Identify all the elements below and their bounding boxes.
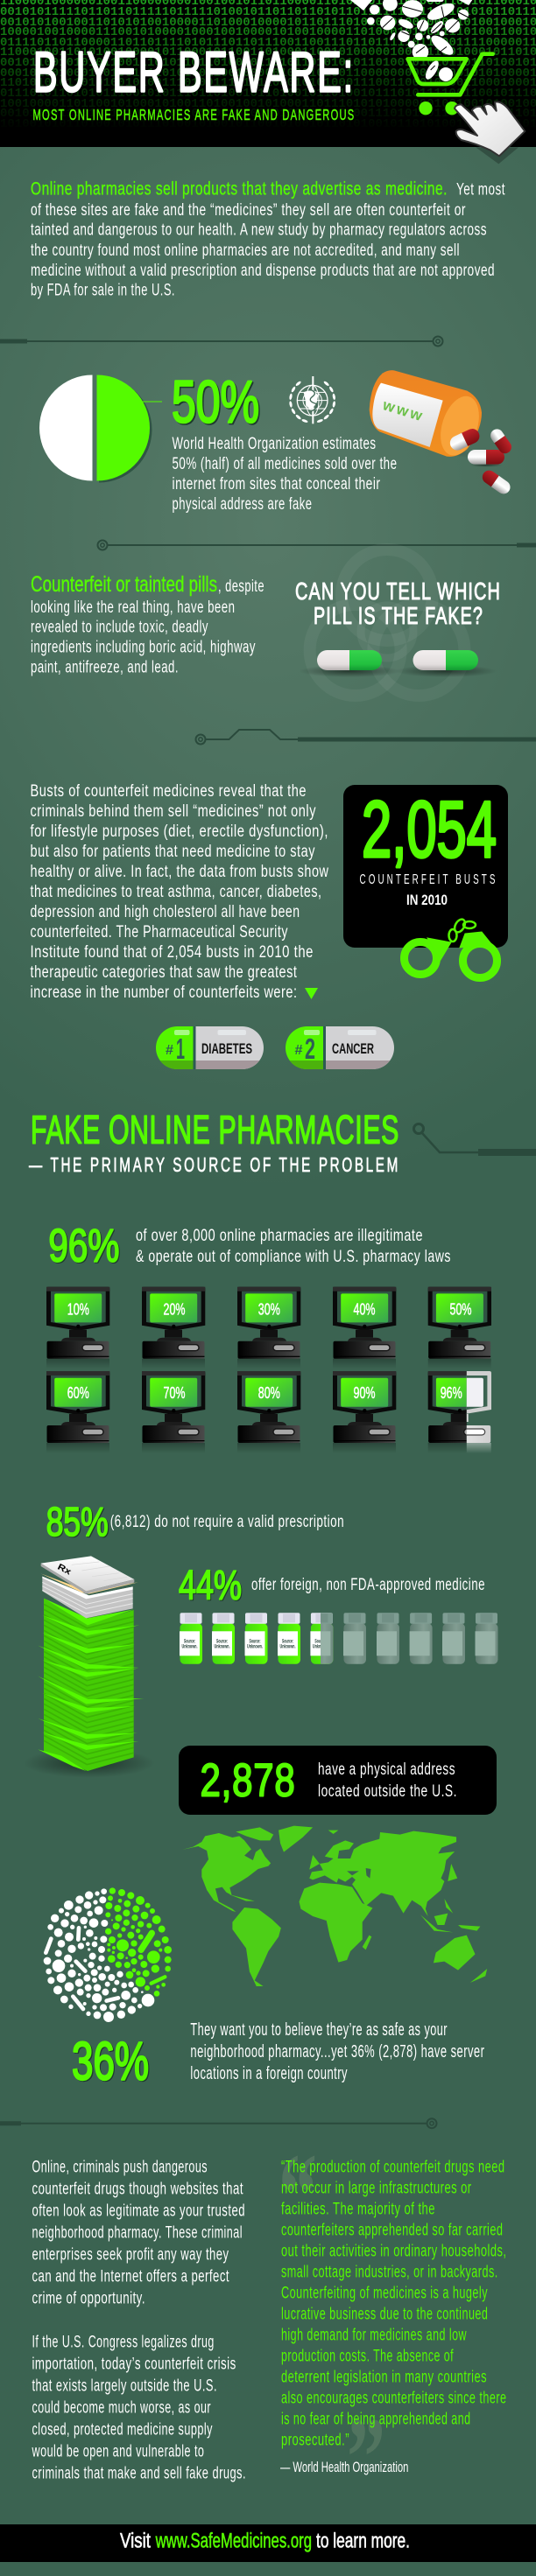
computer 96%: 96% bbox=[441, 1384, 462, 1402]
illustration: stack of prescriptions bbox=[24, 1556, 155, 1778]
icon: shopping cart bbox=[408, 54, 493, 94]
pictogram: computers 10% to 96% bbox=[46, 1287, 491, 1453]
text: online criminals: can and the Internet offers a perfect bbox=[32, 2268, 229, 2286]
text: counterfeit or tainted pills: revealed to include toxic, deadly bbox=[31, 619, 208, 637]
chart: pills dot circle 36% bbox=[44, 1887, 172, 2022]
computer 60% bbox=[46, 1371, 109, 1453]
text: WHO estimate: World Health Organization estimates bbox=[172, 435, 377, 453]
binary code pattern bbox=[0, 0, 536, 131]
computer 40%: 40% bbox=[354, 1300, 375, 1318]
text: congress importation: would be open and vulnerable to bbox=[32, 2443, 204, 2461]
heading: can you tell which pill is the fake bbox=[295, 578, 501, 629]
text: server locations: locations in a foreign country bbox=[190, 2064, 348, 2083]
decorative quotation marks: “ bbox=[279, 2131, 317, 2257]
circuit divider bbox=[413, 1124, 536, 1152]
divider bbox=[0, 2118, 436, 2128]
panel: 2,878 physical address outside the U.S.: located outside the U.S. bbox=[318, 1782, 457, 1801]
icon: hand cursor bbox=[476, 147, 518, 164]
divider bbox=[98, 541, 536, 550]
text: busts of counterfeit medicines: criminals behind them sell “medicines” not only bbox=[30, 802, 316, 821]
stat: 96% illegitimate: 96% bbox=[49, 1222, 121, 1272]
computer 70% bbox=[142, 1371, 205, 1453]
footer bar: to learn more. bbox=[316, 2530, 410, 2553]
text: online criminals: neighborhood pharmacy. These criminal bbox=[32, 2224, 243, 2243]
text: counterfeit or tainted pills bbox=[31, 572, 264, 677]
text: server locations bbox=[190, 2020, 484, 2083]
stat: 50%: 50% bbox=[172, 369, 259, 436]
stat: 50%: 50% bbox=[173, 370, 261, 437]
icon: handcuffs bbox=[405, 918, 497, 978]
stat: 44% foreign medicine: 44% bbox=[179, 1561, 242, 1608]
text: online criminals: counterfeit drugs though websites that bbox=[32, 2180, 243, 2199]
green pills bbox=[105, 1887, 172, 1997]
stat: 36%: 36% bbox=[73, 2032, 150, 2091]
decorative quotation marks bbox=[279, 2131, 385, 2521]
stat: 85% no prescription: (6,812) do not require a valid prescription bbox=[110, 1513, 344, 1531]
text: congress importation: criminals that make and sell fake drugs. bbox=[32, 2465, 246, 2483]
text: busts of counterfeit medicines: but also for patients that need medicine to stay bbox=[30, 843, 315, 861]
text: congress importation: that exists largely outside the U.S. bbox=[32, 2377, 217, 2396]
panel: 2,054 counterfeit busts: IN 2010 bbox=[406, 892, 448, 908]
computer 90% bbox=[333, 1371, 396, 1453]
capsule: #2 cancer: CANCER bbox=[332, 1040, 374, 1057]
computer 30%: 30% bbox=[258, 1300, 280, 1318]
text: congress importation bbox=[32, 2334, 246, 2483]
text: busts of counterfeit medicines: Institute found that of 2,054 busts in 2010 the bbox=[30, 943, 314, 962]
header banner bbox=[0, 0, 536, 147]
pictogram: medicine bottles bbox=[180, 1613, 497, 1664]
attribution: — World Health Organization bbox=[280, 2460, 408, 2475]
text: online criminals bbox=[32, 2159, 245, 2308]
text: busts of counterfeit medicines: for lifestyle purposes (diet, erectile dysfunction), bbox=[30, 822, 328, 841]
text: busts of counterfeit medicines bbox=[30, 782, 329, 1002]
stat: 44% foreign medicine bbox=[179, 1561, 485, 1608]
panel: 2,054 counterfeit busts bbox=[343, 785, 508, 978]
computer 50%: 50% bbox=[450, 1300, 471, 1318]
quote: World Health Organization: prosecuted.” bbox=[281, 2432, 349, 2450]
stat: 85% no prescription bbox=[46, 1499, 344, 1545]
computer 90%: 90% bbox=[354, 1384, 375, 1402]
stat: 96% illegitimate: 96% bbox=[48, 1220, 119, 1272]
text: counterfeit or tainted pills: paint, antifreeze, and lead. bbox=[31, 659, 179, 677]
divider bbox=[196, 730, 536, 744]
text: online criminals: crime of opportunity. bbox=[32, 2290, 145, 2308]
icon: spilled pill bottle: www bbox=[380, 396, 427, 425]
divider bbox=[0, 336, 443, 346]
text: congress importation: could become much worse, as our bbox=[32, 2399, 211, 2418]
intro paragraph: by FDA for sale in the U.S. bbox=[31, 282, 175, 300]
stat: 85% no prescription: 85% bbox=[46, 1499, 109, 1544]
stat: 96% illegitimate bbox=[48, 1220, 451, 1272]
capsule: #1 diabetes: # bbox=[166, 1043, 173, 1058]
intro paragraph bbox=[31, 179, 505, 300]
text: busts of counterfeit medicines: Busts of counterfeit medicines reveal that the bbox=[30, 782, 307, 801]
gray bottles bbox=[310, 1613, 497, 1664]
quote: World Health Organization bbox=[280, 2159, 506, 2475]
computer 10%: 10% bbox=[67, 1300, 89, 1318]
icon: two capsules bbox=[299, 650, 497, 677]
title: BUYER BEWARE: bbox=[33, 40, 355, 103]
text: counterfeit or tainted pills: Counterfeit or tainted pills bbox=[31, 572, 217, 597]
text: congress importation: importation, today’s counterfeit crisis bbox=[32, 2356, 236, 2374]
intro paragraph: Yet most bbox=[456, 181, 505, 200]
footer bar bbox=[0, 2524, 536, 2562]
text: busts of counterfeit medicines: that medicines to treat asthma, cancer, diabetes, bbox=[30, 883, 322, 901]
computer 10% bbox=[46, 1287, 109, 1369]
text: online criminals: enterprises seek profit any way they bbox=[32, 2246, 229, 2264]
capsule: #2 cancer: # bbox=[294, 1043, 303, 1058]
computer 40% bbox=[333, 1287, 396, 1369]
text: counterfeit or tainted pills: ingredients including boric acid, highway bbox=[31, 639, 256, 657]
computer 20% bbox=[142, 1287, 205, 1369]
top prescription sheet bbox=[41, 1556, 134, 1591]
text: online criminals: often look as legitimate as your trusted bbox=[32, 2202, 245, 2221]
green bottles bbox=[180, 1613, 333, 1664]
text: counterfeit or tainted pills: looking like the real thing, have been bbox=[31, 598, 235, 617]
text: busts of counterfeit medicines: healthy or alive. In fact, the data from busts show bbox=[30, 863, 329, 881]
illustration: stack of prescriptions: Rx bbox=[56, 1563, 73, 1578]
capsule: #1 diabetes: DIABETES bbox=[201, 1040, 252, 1057]
capsule: #1 diabetes: 1 bbox=[176, 1032, 185, 1065]
text: congress importation: closed, protected medicine supply bbox=[32, 2421, 213, 2440]
text: busts of counterfeit medicines: increase in the number of counterfeits were: bbox=[30, 984, 298, 1002]
footer bar: Visit bbox=[120, 2530, 151, 2553]
text: busts of counterfeit medicines: counterfeited. The Pharmaceutical Security bbox=[30, 923, 288, 942]
tan sheet bbox=[41, 1573, 138, 1594]
map: world bbox=[182, 1826, 487, 1986]
subtitle: MOST ONLINE PHARMACIES ARE FAKE AND DANGEROUS bbox=[33, 106, 356, 123]
text: congress importation: If the U.S. Congress legalizes drug bbox=[32, 2334, 215, 2352]
pie chart: 50% bbox=[39, 374, 162, 483]
text: WHO estimate: physical address are fake bbox=[172, 495, 312, 514]
computer 96% bbox=[428, 1371, 491, 1453]
capsule: #2 cancer bbox=[286, 1026, 394, 1069]
panel: 2,878 physical address outside the U.S.: have a physical address bbox=[318, 1760, 455, 1779]
text: counterfeit or tainted pills: , despite bbox=[218, 578, 264, 596]
text: WHO estimate: internet from sites that conceal their bbox=[172, 475, 380, 494]
green stack bbox=[38, 1599, 144, 1771]
panel: 2,878 physical address outside the U.S.: 2,878 bbox=[200, 1755, 296, 1806]
icon: down arrow bbox=[305, 988, 318, 999]
computer 80% bbox=[237, 1371, 300, 1453]
computer 80%: 80% bbox=[258, 1384, 280, 1402]
white pills bbox=[44, 1888, 154, 2022]
icon: spilled pill bottle bbox=[365, 370, 514, 496]
stat: 36%: 36% bbox=[72, 2032, 149, 2091]
capsule: #2 cancer: 2 bbox=[305, 1032, 315, 1065]
decorative quotation marks: ” bbox=[347, 2395, 385, 2521]
footer bar: www.SafeMedicines.org bbox=[155, 2530, 312, 2553]
icon: WHO emblem bbox=[289, 376, 335, 424]
stat: 96% illegitimate: of over 8,000 online pharmacies are illegitimate bbox=[136, 1227, 423, 1245]
icon: red and white capsules bbox=[448, 426, 482, 452]
stat: 85% no prescription: 85% bbox=[47, 1500, 109, 1545]
gray paper stack bbox=[42, 1577, 133, 1618]
text: busts of counterfeit medicines: therapeutic categories that saw the greatest bbox=[30, 963, 298, 982]
text: WHO estimate: 50% (half) of all medicines sold over the bbox=[172, 455, 398, 473]
watermark: biohazard symbol bbox=[310, 550, 464, 696]
computer 50% bbox=[428, 1287, 491, 1369]
capsule: #1 diabetes bbox=[156, 1026, 264, 1069]
text: online criminals: Online, criminals push dangerous bbox=[32, 2159, 208, 2177]
computer 30% bbox=[237, 1287, 300, 1369]
icon: falling white pills bbox=[350, 0, 472, 81]
heading: fake online pharmacies bbox=[29, 1108, 400, 1176]
panel: 2,878 physical address outside the U.S. bbox=[179, 1746, 497, 1815]
computer 70%: 70% bbox=[163, 1384, 186, 1402]
icon: shopping cart with pills and pointing hand bbox=[350, 0, 525, 164]
stat: 44% foreign medicine: 44% bbox=[180, 1563, 243, 1608]
computer 20%: 20% bbox=[163, 1300, 186, 1318]
text: WHO estimate bbox=[172, 435, 398, 514]
computer 60%: 60% bbox=[67, 1384, 89, 1402]
quote: World Health Organization: facilities. The majority of the bbox=[281, 2201, 435, 2219]
text: busts of counterfeit medicines: depression and high cholesterol all have been bbox=[30, 903, 300, 921]
